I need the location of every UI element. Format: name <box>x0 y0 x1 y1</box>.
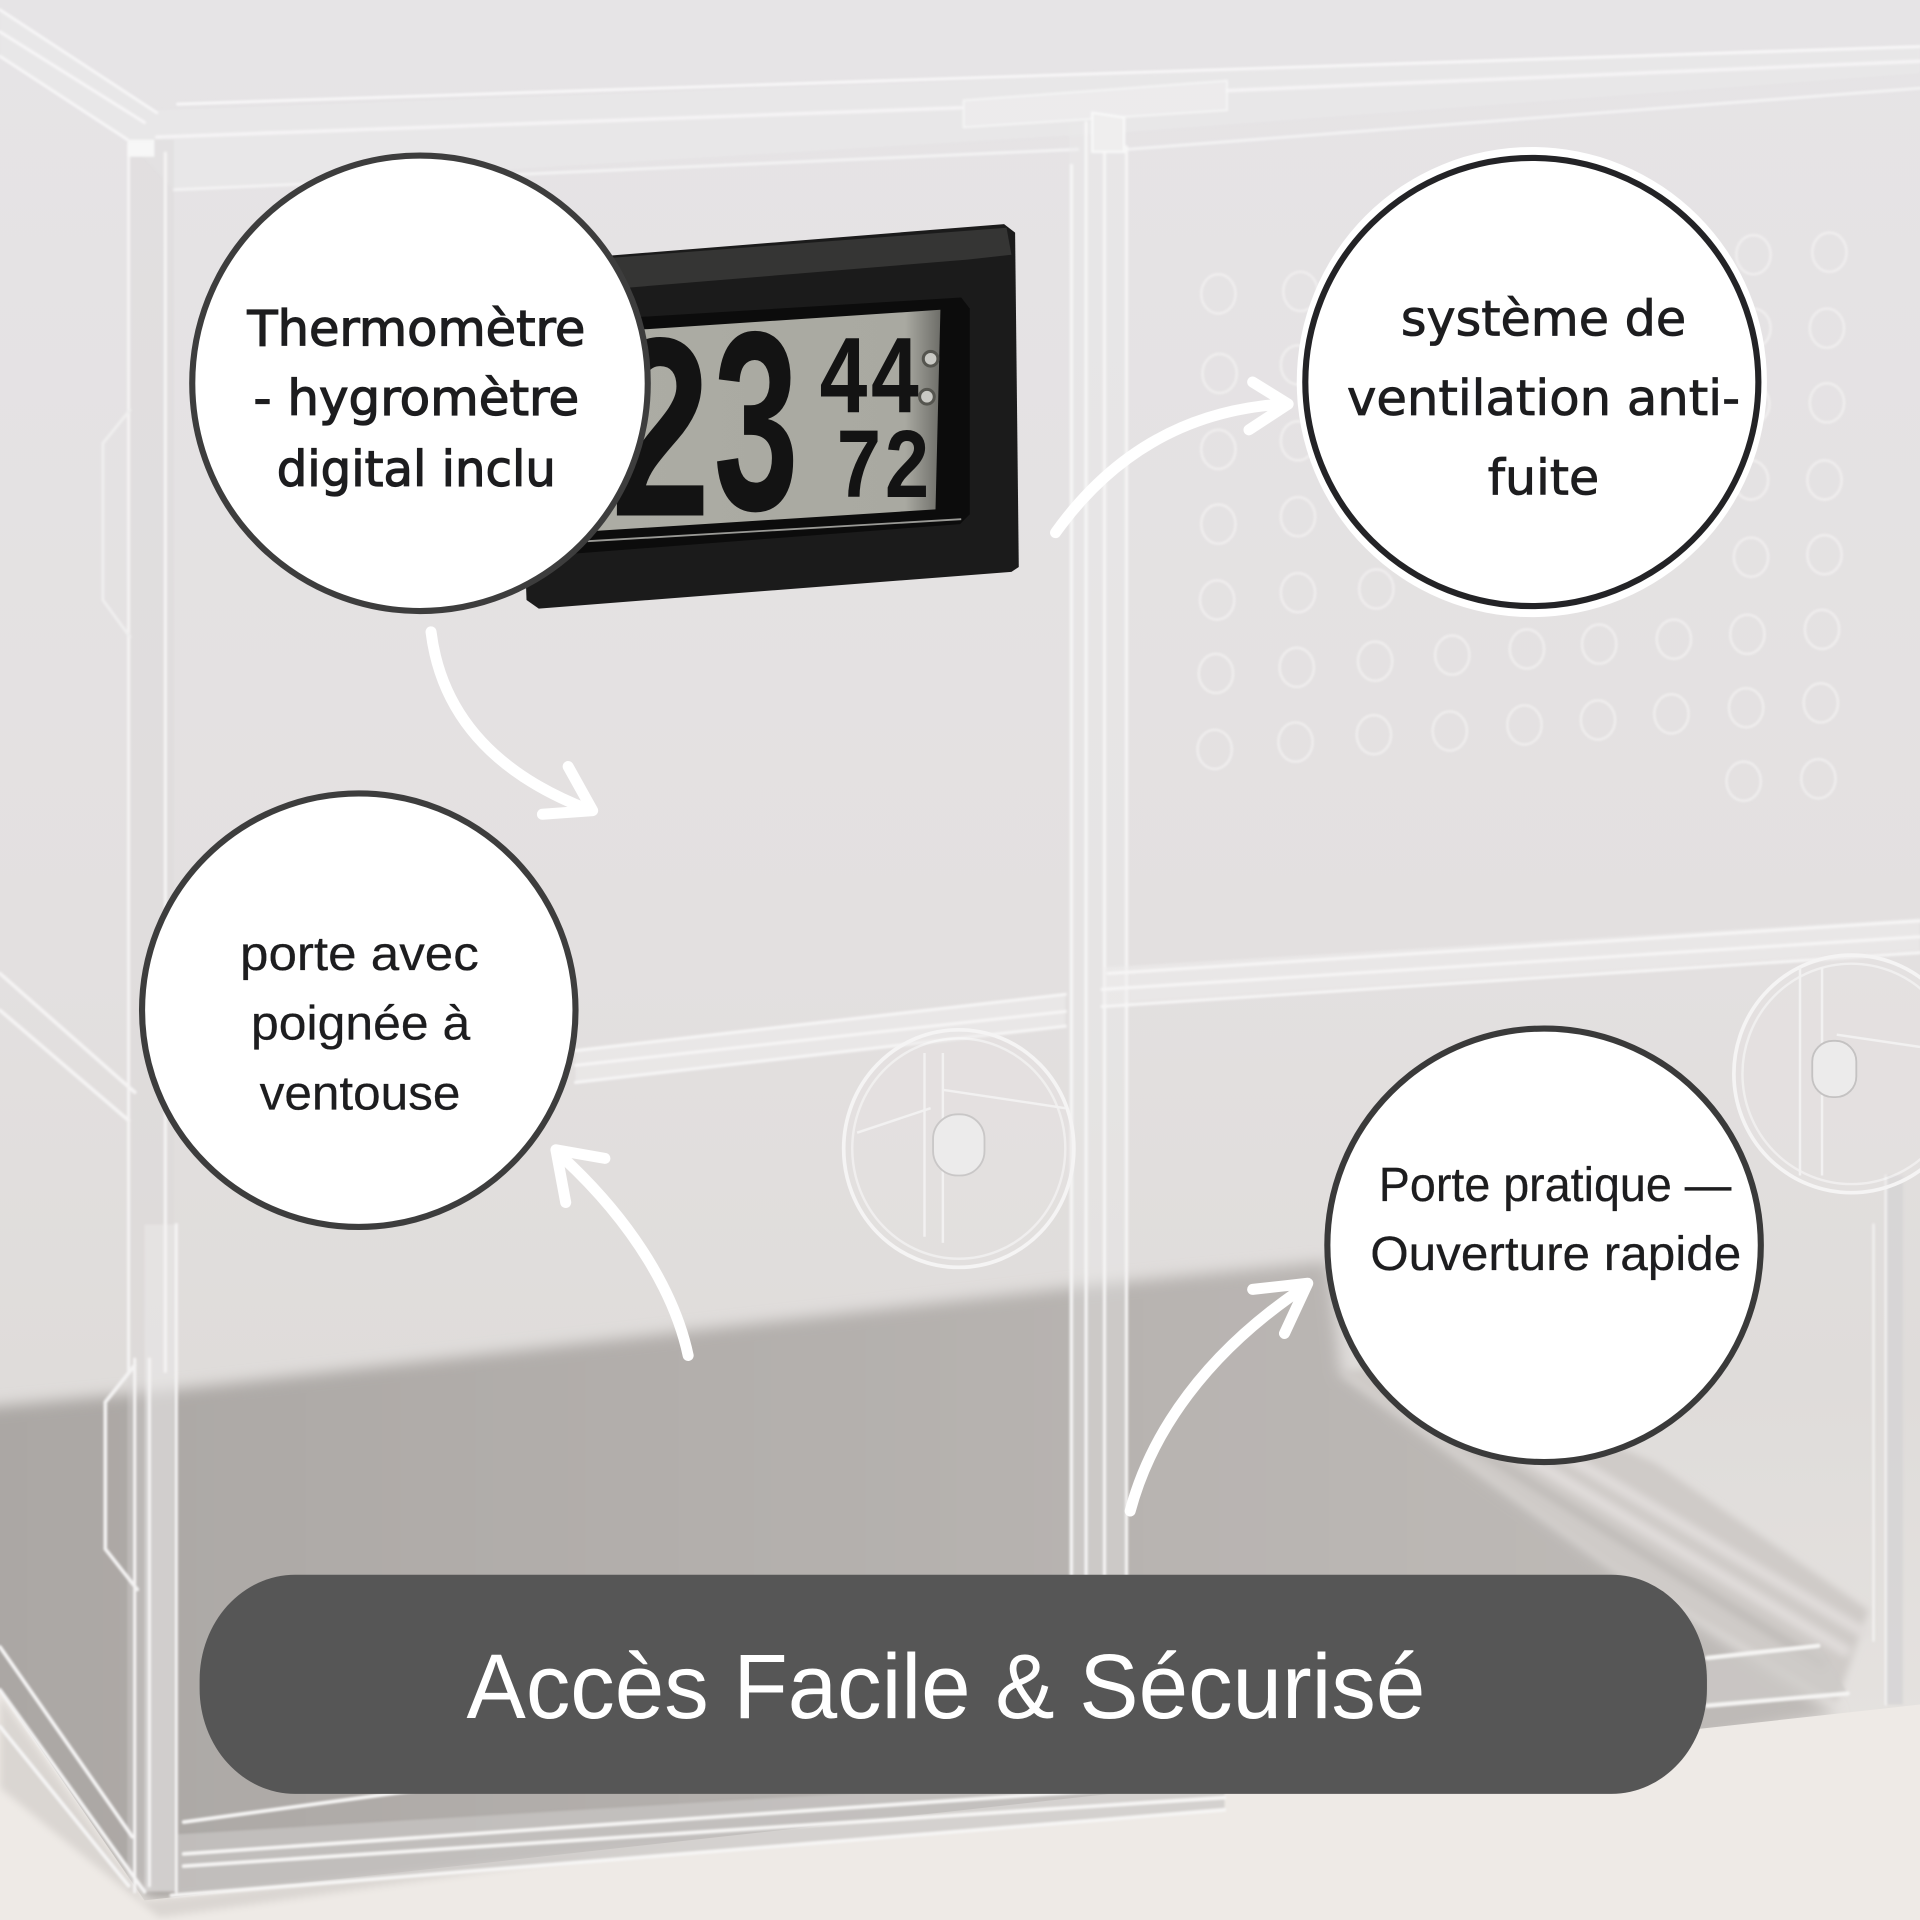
floor shadow seen through the box <box>0 1261 1837 1910</box>
callout: ventilation system: système de <box>1401 291 1686 348</box>
left post <box>127 140 174 1891</box>
callout: door with suction handle: poignée à <box>251 998 471 1051</box>
arrow: ventilation callout <box>1056 382 1288 533</box>
callout: thermometer: Thermomètre <box>246 300 585 357</box>
bottom rails <box>178 1771 1224 1893</box>
right edge <box>1886 1176 1903 1704</box>
left tabs <box>103 410 130 637</box>
callout: ventilation system: ventilation anti- <box>1347 370 1740 427</box>
callout: practical door <box>1327 1029 1761 1462</box>
lid band <box>0 10 1920 190</box>
suction cup right <box>1734 955 1920 1193</box>
LCD main reading, second digit: 3 <box>710 288 801 590</box>
arrow: quick opening callout <box>1130 1283 1308 1511</box>
LCD second reading: 72 <box>835 414 931 528</box>
bottom-left diagonal <box>0 1647 144 1892</box>
callout: practical door: Ouverture rapide <box>1370 1228 1741 1281</box>
center post <box>1069 122 1125 1580</box>
callout: thermometer <box>192 156 648 611</box>
callout: thermometer: digital inclu <box>277 441 556 498</box>
callout: thermometer: - hygromètre <box>253 370 579 427</box>
title banner <box>200 1575 1707 1794</box>
LCD indicator dots <box>920 351 938 404</box>
callout: door with suction handle: porte avec <box>240 928 479 981</box>
LCD humidity reading: 44 <box>818 319 921 447</box>
light floor under the box <box>0 1690 1920 1920</box>
mid rails <box>576 994 1065 1082</box>
callout: practical door: Porte pratique — <box>1379 1159 1732 1212</box>
lid clip <box>964 81 1227 127</box>
ventilation holes <box>1198 233 1847 801</box>
diagonal reflected stripes <box>1341 1359 1869 1702</box>
arrow: thermometer callout <box>431 632 593 814</box>
callout: ventilation system: fuite <box>1488 450 1599 507</box>
arrow: door handle callout <box>556 1150 688 1356</box>
digital thermometer-hygrometer display <box>514 224 1019 609</box>
callout: ventilation system <box>1297 147 1767 617</box>
callout: door with suction handle <box>142 793 576 1227</box>
callout: door with suction handle: ventouse <box>260 1067 460 1120</box>
title banner: Accès Facile & Sécurisé <box>467 1636 1425 1738</box>
suction cup left <box>844 1030 1074 1267</box>
LCD main reading: 2 <box>606 295 714 597</box>
